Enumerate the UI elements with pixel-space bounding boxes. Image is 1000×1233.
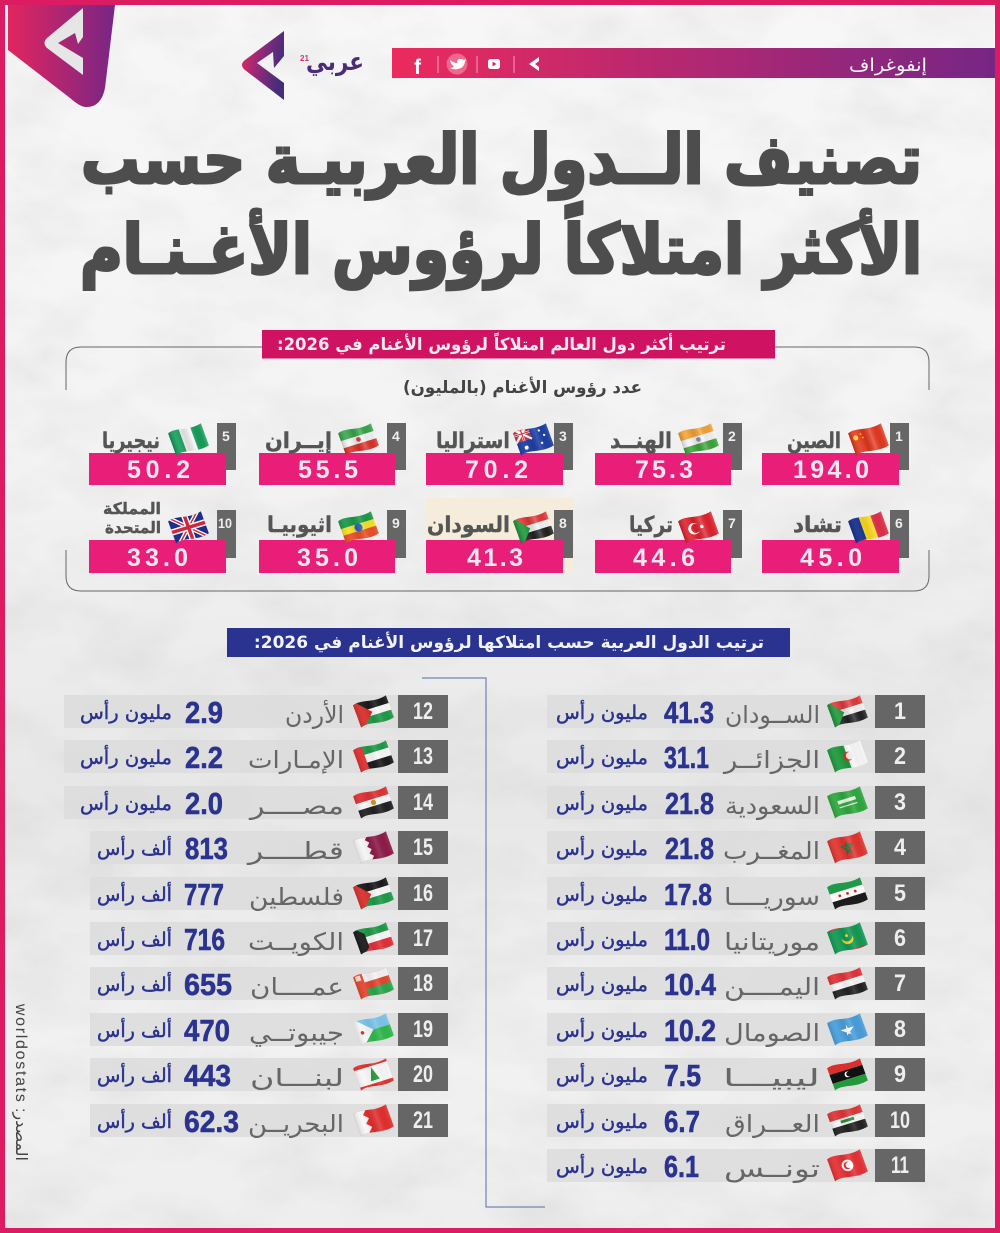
table: Arab ranks 1-11	[547, 691, 925, 1186]
row 14 Egypt	[64, 782, 448, 823]
row 14 Egypt: مليون رأس	[80, 791, 172, 815]
row 2 Algeria: مليون رأس	[556, 745, 648, 769]
row 11 Tunisia: تونــس	[724, 1155, 820, 1183]
row 20 Lebanon: 443	[184, 1058, 231, 1093]
table: Arab ranks 12-21	[64, 691, 448, 1141]
row 14 Egypt: 14	[413, 789, 433, 816]
row 16 Palestine: 777	[184, 877, 224, 912]
card 6 Chad: 45.0	[800, 544, 862, 572]
row 10 Iraq: 6.7	[664, 1104, 700, 1139]
card 7 Turkey	[595, 507, 742, 573]
row 1 Sudan: مليون رأس	[556, 700, 648, 724]
row 1 Sudan: 41.3	[664, 695, 714, 730]
row 8 Somalia: مليون رأس	[556, 1018, 648, 1042]
card 3 Australia: 70.2	[465, 456, 528, 484]
row 21 Bahrain: ألف رأس	[97, 1109, 172, 1133]
row 12 Jordan: 2.9	[185, 695, 223, 730]
icon: facebook: f	[414, 56, 422, 79]
row 13 UAE: 13	[413, 743, 433, 770]
card 2 India: 75.3	[635, 456, 693, 484]
row 17 Kuwait: 716	[184, 922, 225, 957]
card 10 United Kingdom	[89, 499, 236, 573]
row 1 Sudan: الســودان	[725, 701, 820, 729]
row 7 Yemen: 7	[894, 970, 906, 997]
row 2 Algeria: 31.1	[664, 740, 709, 775]
row 21 Bahrain: 21	[413, 1107, 433, 1134]
card 10 United Kingdom: المتحدة	[105, 518, 161, 537]
corner badge logo	[8, 5, 115, 107]
card 4 Iran: 4	[392, 428, 400, 444]
row 19 Djibouti: 470	[184, 1013, 230, 1048]
card 2 India	[595, 419, 742, 485]
row 18 Oman: ألف رأس	[97, 972, 172, 996]
row 16 Palestine: ألف رأس	[97, 882, 172, 906]
row 4 Morocco: 21.8	[665, 831, 714, 866]
row 19 Djibouti: 19	[413, 1016, 433, 1043]
row 8 Somalia: 10.2	[664, 1013, 716, 1048]
card 8 Sudan: 41.3	[467, 544, 523, 572]
source note: المصدر: worldostats	[11, 1003, 29, 1161]
card 7 Turkey: 7	[728, 515, 736, 531]
header label: إنفوغراف	[849, 55, 927, 76]
icon: brand chevron	[529, 57, 539, 71]
row 9 Libya	[547, 1054, 925, 1095]
row 17 Kuwait: الكويــت	[248, 928, 344, 956]
row 17 Kuwait: ألف رأس	[97, 927, 172, 951]
row 6 Mauritania: 11.0	[664, 922, 710, 957]
row 11 Tunisia: مليون رأس	[556, 1154, 648, 1178]
row 15 Qatar: 813	[185, 831, 228, 866]
card 5 Nigeria: 50.2	[127, 456, 190, 484]
row 11 Tunisia: 6.1	[664, 1149, 699, 1184]
card 6 Chad	[762, 507, 909, 573]
row 12 Jordan: مليون رأس	[80, 700, 172, 724]
row 5 Syria: سوريــــا	[724, 883, 820, 911]
row 3 Saudi Arabia: السعودية	[725, 792, 820, 820]
row 21 Bahrain: البحريــن	[248, 1110, 344, 1138]
card 8 Sudan	[426, 507, 573, 573]
icon: twitter	[446, 54, 468, 74]
row 21 Bahrain	[90, 1100, 448, 1141]
row 6 Mauritania: موريتانيا	[724, 928, 820, 956]
row 12 Jordan	[64, 691, 448, 732]
icon: youtube	[488, 59, 500, 69]
row 10 Iraq	[547, 1100, 925, 1141]
highlight: Sudan card	[426, 498, 574, 574]
row 6 Mauritania: 6	[894, 925, 906, 952]
row 19 Djibouti	[90, 1009, 448, 1050]
row 9 Libya: ليبيـــا	[723, 1064, 820, 1092]
row 7 Yemen: اليمــــن	[724, 973, 820, 1001]
card 2 India: الهنــد	[610, 429, 672, 454]
card 7 Turkey: 44.6	[633, 544, 695, 572]
row 7 Yemen: مليون رأس	[556, 972, 648, 996]
world ranking banner: ترتيب أكثر دول العالم امتلاكاً لرؤوس الأغنام في 2026:	[277, 331, 726, 355]
row 21 Bahrain: 62.3	[184, 1104, 239, 1139]
brand logo: Arabi21: عربي	[306, 47, 364, 77]
Arab ranking banner: ترتيب الدول العربية حسب امتلاكها لرؤوس الأغنام في 2026:	[254, 632, 764, 653]
row 10 Iraq: مليون رأس	[556, 1109, 648, 1133]
card 9 Ethiopia: 9	[392, 515, 400, 531]
card 1 China: 1	[895, 428, 903, 444]
row 5 Syria: 17.8	[664, 877, 712, 912]
row 11 Tunisia	[547, 1145, 925, 1186]
card 1 China: الصين	[787, 429, 841, 454]
row 4 Morocco: مليون رأس	[556, 836, 648, 860]
connector line	[422, 678, 545, 1207]
row 10 Iraq: 10	[890, 1107, 910, 1134]
row 18 Oman: عمــــان	[250, 973, 344, 1001]
row 19 Djibouti: ألف رأس	[97, 1018, 172, 1042]
card 8 Sudan: السودان	[427, 513, 510, 538]
card 4 Iran: 55.5	[298, 456, 358, 484]
row 20 Lebanon	[90, 1054, 448, 1095]
row 6 Mauritania: مليون رأس	[556, 927, 648, 951]
card 5 Nigeria: 5	[222, 428, 230, 444]
row 10 Iraq: العـــراق	[725, 1110, 820, 1138]
row 15 Qatar: ألف رأس	[97, 836, 172, 860]
card 4 Iran	[259, 419, 406, 485]
brand logo: Arabi21	[242, 31, 364, 100]
row 14 Egypt: مصــــر	[249, 792, 344, 820]
row 1 Sudan: 1	[894, 698, 906, 725]
row 5 Syria: 5	[894, 880, 906, 907]
row 12 Jordan: 12	[413, 698, 433, 725]
row 20 Lebanon: ألف رأس	[97, 1063, 172, 1087]
row 17 Kuwait: 17	[413, 925, 433, 952]
card 9 Ethiopia: 35.0	[297, 544, 358, 572]
row 8 Somalia: 8	[894, 1016, 906, 1043]
card 10 United Kingdom: 10	[218, 515, 232, 531]
card 9 Ethiopia: اثيوبيـا	[267, 513, 332, 538]
row 20 Lebanon: لبنـــان	[250, 1064, 344, 1092]
card 8 Sudan: 8	[559, 515, 567, 531]
card 2 India: 2	[728, 428, 736, 444]
row 5 Syria: مليون رأس	[556, 882, 648, 906]
row 2 Algeria	[547, 736, 925, 777]
row 2 Algeria: الجزائــر	[723, 746, 820, 774]
row 3 Saudi Arabia: 21.8	[665, 786, 714, 821]
row 8 Somalia: الصومال	[724, 1019, 820, 1047]
row 3 Saudi Arabia	[547, 782, 925, 823]
card 10 United Kingdom: 33.0	[127, 544, 188, 572]
row 9 Libya: مليون رأس	[556, 1063, 648, 1087]
row 15 Qatar: قطــــر	[247, 837, 344, 865]
card 10 United Kingdom: المملكة	[103, 499, 161, 518]
row 3 Saudi Arabia: 3	[894, 789, 906, 816]
card 5 Nigeria: نيجيريا	[102, 429, 160, 454]
header bar	[392, 48, 995, 79]
card 1 China	[762, 419, 909, 485]
row 18 Oman	[90, 963, 448, 1004]
row 15 Qatar: 15	[413, 834, 433, 861]
row 3 Saudi Arabia: مليون رأس	[556, 791, 648, 815]
row 9 Libya: 9	[894, 1061, 906, 1088]
row 16 Palestine: فلسطين	[249, 883, 344, 911]
Arab ranking banner	[227, 628, 790, 657]
row 7 Yemen	[547, 963, 925, 1004]
card 3 Australia	[426, 419, 573, 485]
row 12 Jordan: الأردن	[285, 700, 344, 729]
row 11 Tunisia: 11	[891, 1152, 909, 1179]
row 16 Palestine: 16	[413, 880, 433, 907]
brand logo: Arabi21: 21	[300, 54, 309, 63]
panel: world ranking	[66, 330, 929, 591]
world ranking banner	[262, 330, 775, 358]
card 4 Iran: إيــران	[265, 429, 332, 454]
row 19 Djibouti: جيبوتــي	[249, 1019, 344, 1047]
card 3 Australia: 3	[559, 428, 567, 444]
row 8 Somalia	[547, 1009, 925, 1050]
row 18 Oman: 655	[184, 967, 232, 1002]
row 4 Morocco	[547, 827, 925, 868]
row 17 Kuwait	[90, 918, 448, 959]
card 6 Chad: تشاد	[793, 513, 842, 538]
subtitle: عدد رؤوس الأغنام (بالمليون)	[403, 377, 642, 398]
row 13 UAE: مليون رأس	[80, 745, 172, 769]
card 6 Chad: 6	[895, 515, 903, 531]
card 3 Australia: استراليا	[436, 429, 510, 454]
panel frame	[66, 347, 929, 591]
row 13 UAE	[64, 736, 448, 777]
row 9 Libya: 7.5	[664, 1058, 701, 1093]
card 1 China: 194.0	[793, 456, 869, 484]
row 13 UAE: الإمـارات	[248, 746, 344, 774]
row 1 Sudan	[547, 691, 925, 732]
card 7 Turkey: تركيا	[629, 513, 673, 538]
row 5 Syria	[547, 873, 925, 914]
row 2 Algeria: 2	[894, 743, 906, 770]
card 9 Ethiopia	[259, 507, 406, 573]
title	[80, 121, 922, 290]
row 18 Oman: 18	[413, 970, 433, 997]
card 5 Nigeria	[89, 419, 236, 485]
row 14 Egypt: 2.0	[185, 786, 223, 821]
row 20 Lebanon: 20	[413, 1061, 433, 1088]
row 4 Morocco: المغــرب	[723, 837, 820, 865]
row 13 UAE: 2.2	[185, 740, 223, 775]
row 16 Palestine	[90, 873, 448, 914]
row 15 Qatar	[90, 827, 448, 868]
row 7 Yemen: 10.4	[664, 967, 717, 1002]
row 4 Morocco: 4	[894, 834, 907, 861]
row 6 Mauritania	[547, 918, 925, 959]
